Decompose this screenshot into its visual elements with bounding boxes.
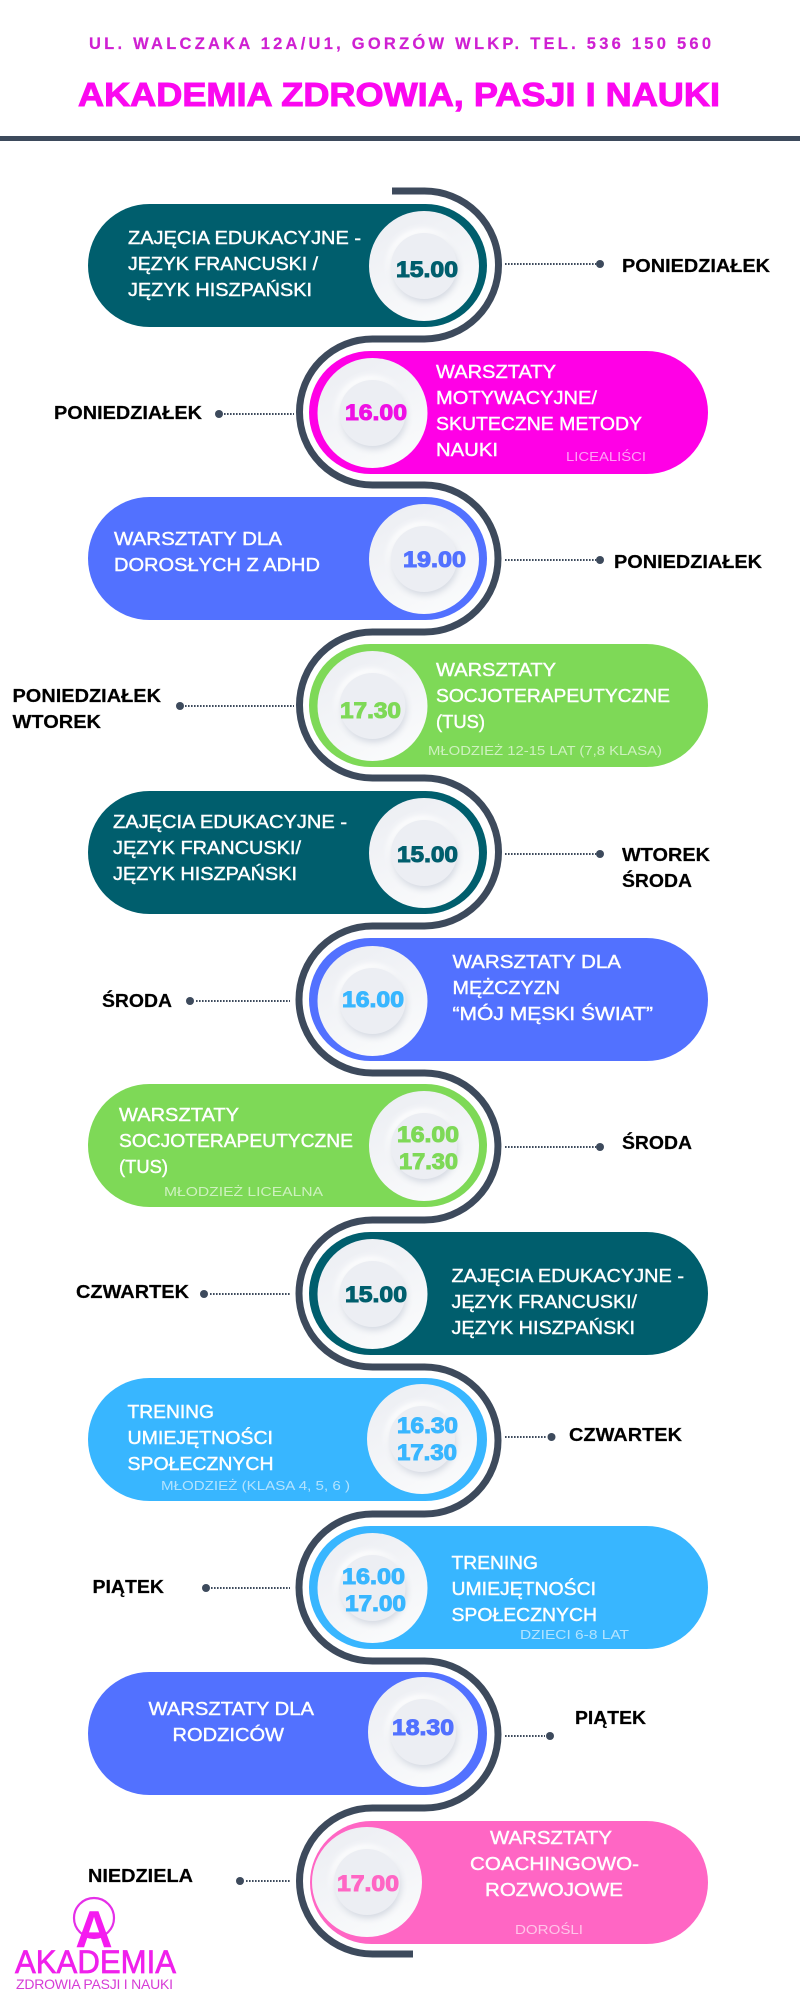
times: [397, 1122, 459, 1174]
description: “MÓJ MĘSKI ŚWIAT”: [452, 1003, 653, 1024]
audience note: MŁODZIEŻ 12-15 LAT (7,8 KLASA): [428, 743, 662, 758]
description: [436, 660, 670, 732]
audience note: DZIECI 6-8 LAT: [520, 1627, 629, 1642]
description: [436, 362, 642, 460]
description: JĘZYK HISZPAŃSKI: [452, 1318, 635, 1338]
time: 17.00: [337, 1871, 399, 1896]
description: [452, 952, 653, 1024]
day label: Poniedziałek 16.00: PONIEDZIAŁEK: [54, 403, 202, 423]
time disc: [369, 1091, 479, 1201]
times: 16.30: [397, 1413, 458, 1438]
description: JĘZYK HISZPAŃSKI: [128, 280, 312, 300]
pill: [88, 1378, 487, 1501]
day label: Niedziela 17.00: NIEDZIELA: [88, 1866, 193, 1886]
description: WARSZTATY: [490, 1828, 612, 1848]
description: [148, 1699, 314, 1745]
day label: Niedziela 17.00: [88, 1866, 290, 1886]
day label: Poniedziałek Wtorek 17.30: WTOREK: [12, 712, 101, 732]
address line: UL. WALCZAKA 12A/U1, GORZÓW WLKP. TEL. 536 150 560: [89, 34, 711, 53]
panel: row 11 Friday 18.30: [88, 1672, 487, 1795]
header divider: [0, 136, 800, 141]
pill: [309, 938, 708, 1061]
time: 15.00: [345, 1282, 407, 1307]
day label: Środa 16.00 17.30: [505, 1132, 692, 1153]
title: AKADEMIA ZDROWIA, PASJI I NAUKI: [78, 77, 720, 114]
day label: Piątek 16.00: PIĄTEK: [92, 1577, 164, 1597]
day label: Środa 16.00: ŚRODA: [102, 990, 172, 1011]
logo tagline: ZDROWIA PASJI I NAUKI: [16, 1976, 173, 1992]
time disc: [368, 1677, 478, 1787]
pill: [88, 1672, 487, 1795]
time disc: [318, 946, 428, 1056]
time disc: [318, 1533, 428, 1643]
description: SKUTECZNE METODY: [436, 414, 642, 434]
time disc: [369, 504, 479, 614]
day label: Piątek 16.00: [92, 1577, 290, 1597]
description: [114, 529, 320, 575]
description: ROZWOJOWE: [485, 1880, 623, 1900]
description: SOCJOTERAPEUTYCZNE: [436, 686, 670, 706]
serpentine timeline path: [299, 191, 498, 1954]
description: TRENING: [128, 1402, 214, 1422]
day label: Czwartek 16.30: CZWARTEK: [569, 1425, 682, 1445]
day label: Czwartek 15.00: CZWARTEK: [76, 1282, 189, 1302]
pill: [309, 1526, 708, 1649]
panel: row 2 Monday 16.00: [309, 351, 708, 474]
panel: row 10 Friday 16.00 17.00: [309, 1526, 708, 1649]
description: UMIEJĘTNOŚCI: [452, 1578, 596, 1599]
audience note: MŁODZIEŻ LICEALNA: [164, 1184, 323, 1199]
time disc: [369, 211, 479, 321]
description: [113, 812, 347, 884]
day label: Poniedziałek 16.00: [54, 403, 294, 423]
description: ZAJĘCIA EDUKACYJNE -: [113, 812, 347, 832]
description: [452, 1266, 684, 1338]
description: JĘZYK FRANCUSKI/: [113, 838, 301, 858]
panel: row 8 Thursday 15.00: [309, 1232, 708, 1355]
audience note: DOROŚLI: [515, 1922, 583, 1937]
icon: ring: [74, 1898, 114, 1938]
pill: [310, 1821, 708, 1944]
times: 16.00: [397, 1122, 459, 1147]
description: [470, 1828, 639, 1900]
panel: row 7 Wednesday 16.00 17.30: [88, 1084, 487, 1207]
description: (TUS): [119, 1157, 168, 1177]
description: WARSZTATY DLA: [114, 529, 282, 549]
description: [128, 1402, 274, 1474]
description: JĘZYK FRANCUSKI /: [128, 254, 318, 274]
description: TRENING: [452, 1553, 538, 1573]
time disc: [318, 358, 428, 468]
day label: Środa 16.00: [102, 990, 290, 1011]
description: MOTYWACYJNE/: [436, 388, 597, 408]
panel: row 4 Monday Tuesday 17.30: [309, 644, 708, 767]
description: ZAJĘCIA EDUKACYJNE -: [452, 1266, 684, 1286]
pill: [88, 204, 487, 327]
description: WARSZTATY: [436, 660, 556, 680]
day label: Wtorek Środa 15.00: ŚRODA: [622, 870, 692, 891]
day label: Piątek 18.30: [505, 1708, 646, 1740]
time: 16.00: [342, 987, 404, 1012]
description: [452, 1553, 597, 1625]
audience note: LICEALIŚCI: [566, 449, 646, 464]
pill: [309, 1232, 708, 1355]
logo: Akademia: [15, 1898, 177, 1992]
logo wordmark: AKADEMIA: [15, 1944, 177, 1980]
times: [342, 1564, 406, 1616]
pill: [309, 644, 708, 767]
day label: Poniedziałek 19.00: PONIEDZIAŁEK: [614, 552, 762, 572]
description: JĘZYK FRANCUSKI/: [452, 1292, 637, 1312]
time disc: [312, 1827, 422, 1937]
panel: row 6 Wednesday 16.00: [309, 938, 708, 1061]
pill: [88, 1084, 487, 1207]
day label: Poniedziałek 15.00: PONIEDZIAŁEK: [622, 256, 770, 276]
time: 18.30: [392, 1715, 454, 1740]
time: 19.00: [403, 547, 466, 572]
time disc: [367, 1384, 477, 1494]
times: 17.30: [397, 1440, 457, 1465]
description: NAUKI: [436, 440, 498, 460]
pill: [88, 791, 487, 914]
day label: Poniedziałek Wtorek 17.30: PONIEDZIAŁEK: [12, 686, 161, 706]
description: SPOŁECZNYCH: [452, 1605, 597, 1625]
times: [397, 1413, 458, 1465]
description: WARSZTATY DLA: [148, 1699, 314, 1719]
day label: Poniedziałek 19.00: [505, 552, 762, 572]
description: WARSZTATY DLA: [452, 952, 621, 972]
time disc: [318, 1239, 428, 1349]
time: 15.00: [396, 257, 458, 282]
description: JĘZYK HISZPAŃSKI: [113, 864, 297, 884]
time disc: [318, 651, 428, 761]
logo letter: A: [75, 1901, 113, 1959]
time: 16.00: [345, 400, 407, 425]
description: ZAJĘCIA EDUKACYJNE -: [128, 228, 361, 248]
panel: row 9 Thursday 16.30 17.30: [88, 1378, 487, 1501]
day label: Wtorek Środa 15.00: [505, 845, 710, 891]
description: WARSZTATY: [436, 362, 556, 382]
time disc: [369, 798, 479, 908]
description: WARSZTATY: [119, 1105, 239, 1125]
panel: row 1 Monday 15.00: [88, 204, 487, 327]
day label: Czwartek 16.30: [505, 1425, 682, 1445]
description: SOCJOTERAPEUTYCZNE: [119, 1131, 353, 1151]
pill: [309, 351, 708, 474]
description: RODZICÓW: [172, 1724, 284, 1745]
description: UMIEJĘTNOŚCI: [128, 1427, 273, 1448]
day label: Czwartek 15.00: [76, 1282, 290, 1302]
day label: Środa 16.00 17.30: ŚRODA: [622, 1132, 692, 1153]
description: (TUS): [436, 712, 485, 732]
panel: row 12 Sunday 17.00: [310, 1821, 708, 1944]
day label: Poniedziałek 15.00: [505, 256, 770, 276]
description: COACHINGOWO-: [470, 1854, 639, 1874]
description: [128, 228, 361, 300]
panel: row 3 Monday 19.00: [88, 497, 487, 620]
times: 17.30: [399, 1149, 458, 1174]
time: 15.00: [397, 842, 458, 867]
description: [119, 1105, 353, 1177]
description: SPOŁECZNYCH: [128, 1454, 274, 1474]
time: 17.30: [340, 698, 401, 723]
pill: [88, 497, 487, 620]
day label: Piątek 18.30: PIĄTEK: [575, 1708, 646, 1728]
audience note: MŁODZIEŻ (KLASA 4, 5, 6 ): [161, 1478, 350, 1493]
day label: Wtorek Środa 15.00: WTOREK: [622, 845, 710, 865]
day label: Poniedziałek Wtorek 17.30: [12, 686, 294, 732]
times: 17.00: [345, 1591, 406, 1616]
times: 16.00: [342, 1564, 405, 1589]
description: DOROSŁYCH Z ADHD: [114, 555, 320, 575]
description: MĘŻCZYZN: [452, 978, 560, 998]
panel: row 5 Tuesday Wednesday 15.00: [88, 791, 487, 914]
